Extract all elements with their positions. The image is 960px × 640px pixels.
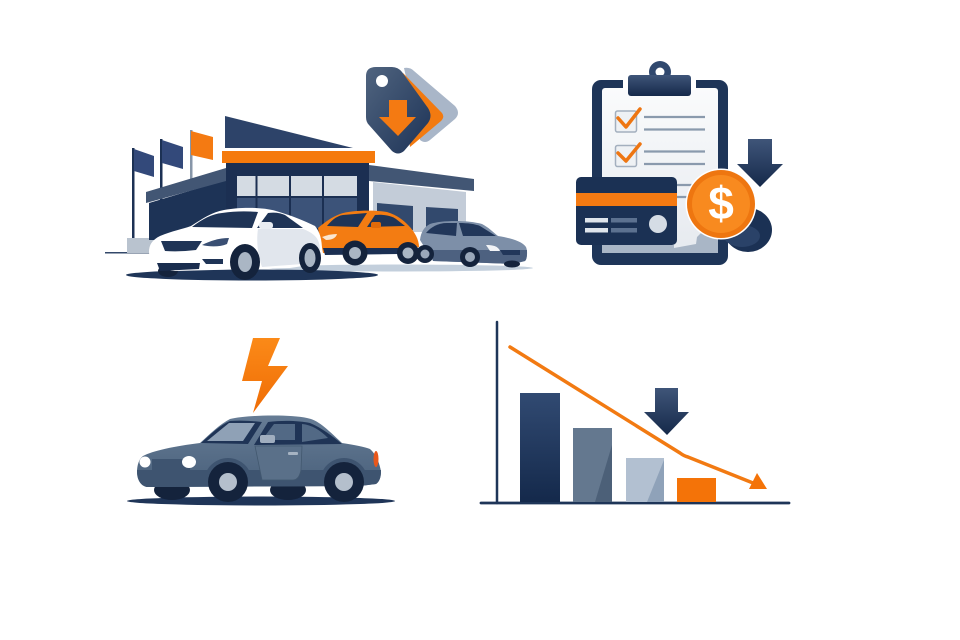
illustration: falling bar chart [481, 322, 789, 503]
illustration: car with lightning bolt [127, 338, 395, 506]
flag poles and flags [127, 130, 213, 253]
price tag with down arrow [366, 67, 458, 154]
sedan [137, 415, 381, 502]
dark coin behind [724, 208, 772, 252]
lightning bolt [242, 338, 288, 413]
ground shadow [127, 496, 395, 506]
dealership building [146, 116, 474, 240]
ground shadows [105, 252, 533, 280]
credit card [576, 177, 677, 245]
bar 2 [573, 428, 612, 502]
axes [481, 322, 789, 503]
down arrow [737, 139, 783, 187]
bar 1 [520, 393, 560, 502]
orange dollar coin [686, 168, 756, 240]
checklist [616, 109, 705, 197]
clipboard [592, 61, 728, 265]
orange car [318, 211, 419, 266]
falling trend arrow [510, 347, 767, 489]
dollar sign: $ [708, 177, 734, 229]
illustration: car dealership [105, 67, 533, 280]
down arrow [644, 388, 689, 435]
white car [149, 208, 322, 280]
bar 3 [626, 458, 664, 502]
illustration: clipboard, card and coin [576, 61, 783, 265]
bar 4 [677, 478, 716, 502]
gray car [416, 221, 527, 268]
